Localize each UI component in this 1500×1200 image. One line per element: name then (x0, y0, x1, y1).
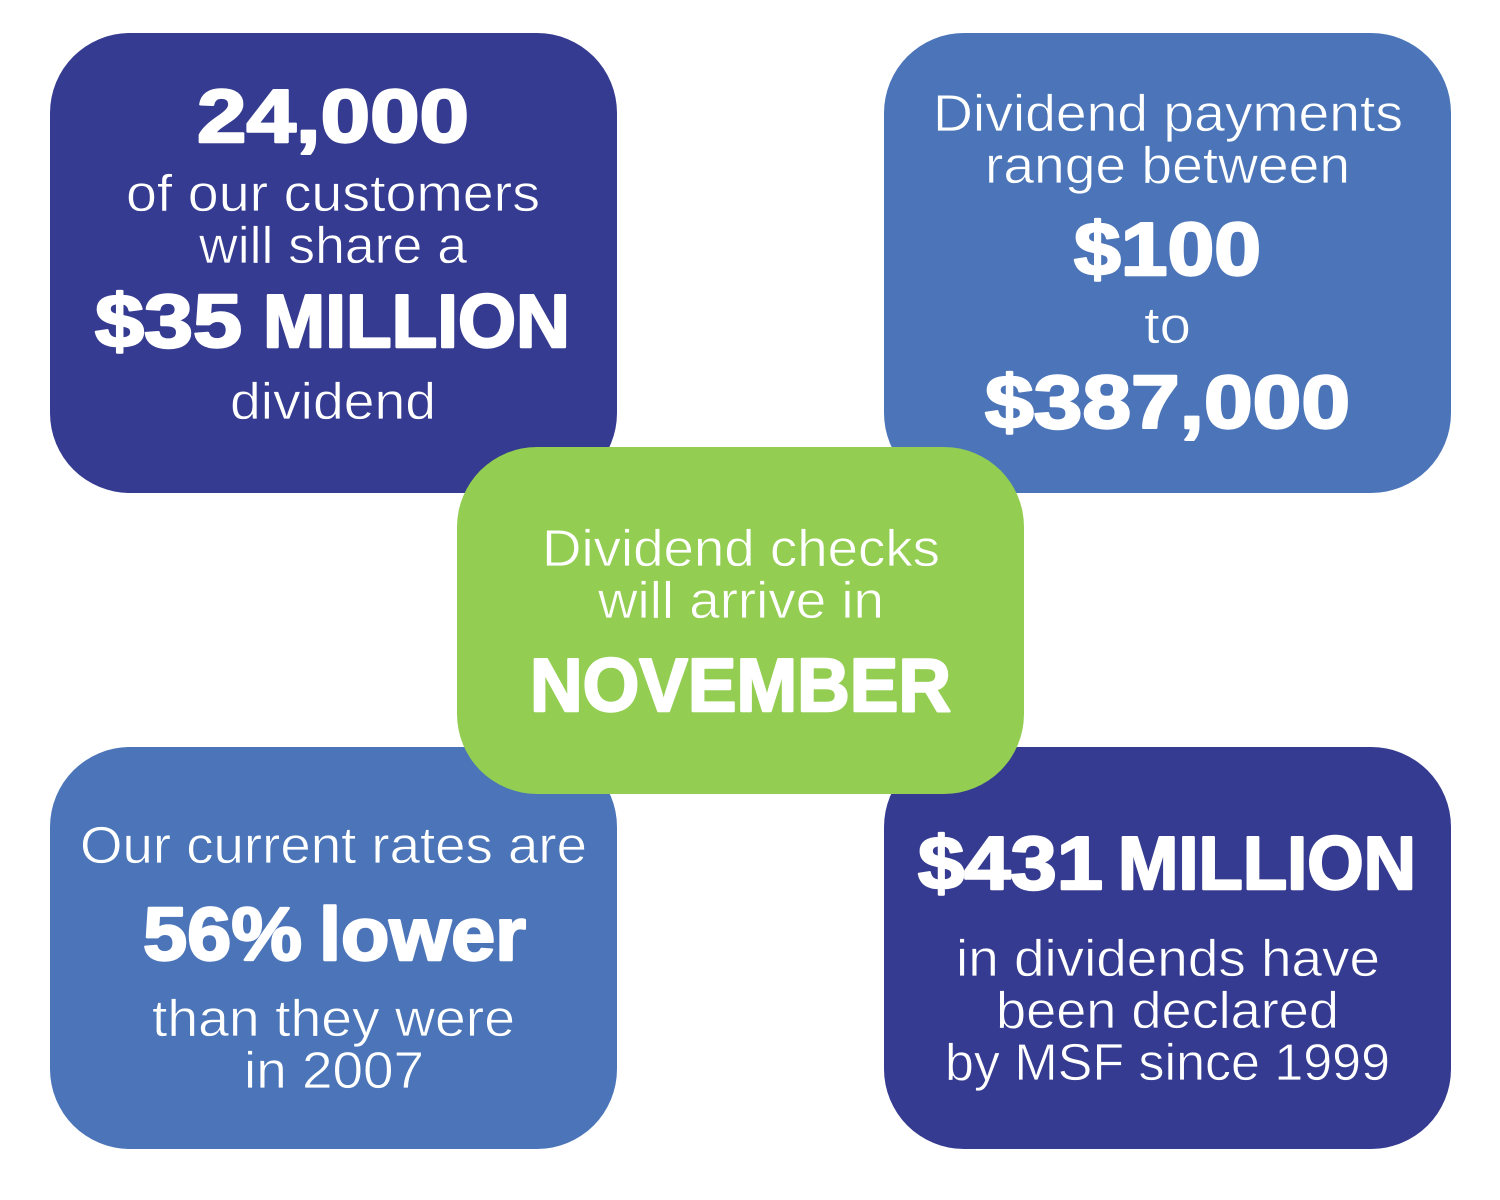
text: in 2007: in 2007 (244, 1042, 424, 1100)
big number: 56% lower: 56% (143, 892, 302, 976)
text: Dividend payments: Dividend payments (933, 85, 1403, 143)
big number: $431 MILLION: $431 (918, 821, 1103, 905)
big number: $431 MILLION: MILLION (1118, 821, 1416, 905)
big number: $387,000: $387,000 (985, 360, 1350, 444)
panel: total dividends declared (884, 747, 1451, 1149)
big number: 56% lower: lower (319, 892, 526, 976)
text: of our customers: of our customers (126, 165, 540, 223)
panel background (50, 747, 617, 1149)
text: been declared: been declared (996, 982, 1339, 1040)
text: by MSF since 1999: by MSF since 1999 (945, 1034, 1390, 1092)
text: Our current rates are: Our current rates are (80, 817, 587, 875)
text: than they were: than they were (152, 990, 515, 1048)
big text: NOVEMBER: NOVEMBER (530, 643, 951, 727)
big number: $35 MILLION: $35 (95, 279, 242, 363)
panel background (457, 447, 1024, 794)
text: to: to (1144, 297, 1191, 355)
text: Dividend checks: Dividend checks (542, 520, 940, 578)
text: range between: range between (985, 137, 1350, 195)
text: will share a: will share a (198, 217, 467, 275)
big number: $100: $100 (1074, 207, 1261, 291)
panel: rates lower than 2007 (50, 747, 617, 1149)
text: in dividends have: in dividends have (956, 930, 1380, 988)
panel background (50, 33, 617, 493)
panel background (884, 33, 1451, 493)
big number: 24,000: 24,000 (197, 74, 469, 158)
text: will arrive in: will arrive in (597, 572, 884, 630)
panel background (884, 747, 1451, 1149)
big number: $35 MILLION: MILLION (263, 279, 570, 363)
panel: dividend payment range (884, 33, 1451, 493)
text: dividend: dividend (230, 373, 436, 431)
panel: center November callout (457, 447, 1024, 794)
panel: customers sharing dividend (50, 33, 617, 493)
